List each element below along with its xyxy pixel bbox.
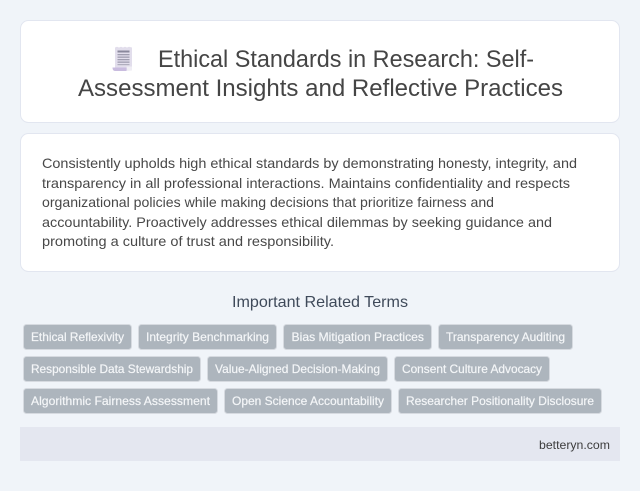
tags xyxy=(24,324,602,414)
tag: Algorithmic Fairness Assessment: Algorithmic Fairness Assessment xyxy=(31,394,211,408)
tag: Integrity Benchmarking: Integrity Benchmarking xyxy=(146,330,269,344)
description text: organizational policies while making decisions that prioritize fairness and xyxy=(42,194,494,210)
icon: document scroll xyxy=(112,47,132,71)
footer bar xyxy=(20,427,620,461)
heading: important related terms: Important Related Terms xyxy=(232,294,408,311)
tag: Researcher Positionality Disclosure: Researcher Positionality Disclosure xyxy=(406,394,594,408)
tag: Transparency Auditing: Transparency Auditing xyxy=(446,330,565,344)
tag: Consent Culture Advocacy xyxy=(394,356,550,382)
tag: Open Science Accountability xyxy=(224,388,392,414)
footer text: betteryn.com xyxy=(539,438,610,452)
description text: Consistently upholds high ethical standards by demonstrating honesty, integrity, and xyxy=(42,155,577,171)
tag: Transparency Auditing xyxy=(438,324,572,350)
panel: title card xyxy=(20,20,620,122)
description text: transparency in all professional interactions. Maintains confidentiality and respects xyxy=(42,175,570,191)
tag: Ethical Reflexivity: Ethical Reflexivity xyxy=(31,330,124,344)
tag: Researcher Positionality Disclosure xyxy=(398,388,602,414)
tag: Consent Culture Advocacy: Consent Culture Advocacy xyxy=(402,362,542,376)
description text xyxy=(42,155,577,249)
tag: Bias Mitigation Practices xyxy=(284,324,432,350)
tag: Open Science Accountability: Open Science Accountability xyxy=(232,394,384,408)
tag: Algorithmic Fairness Assessment xyxy=(24,388,218,414)
tag: Ethical Reflexivity xyxy=(24,324,132,350)
tag: Bias Mitigation Practices: Bias Mitigation Practices xyxy=(292,330,424,344)
tag: Value-Aligned Decision-Making: Value-Aligned Decision-Making xyxy=(215,362,380,376)
tag: Value-Aligned Decision-Making xyxy=(208,356,388,382)
panel: description xyxy=(20,134,620,272)
title text: Assessment Insights and Reflective Practices xyxy=(78,75,563,102)
title text: Ethical Standards in Research: Self- xyxy=(158,46,534,73)
tag: Responsible Data Stewardship xyxy=(24,356,200,382)
tag: Responsible Data Stewardship: Responsible Data Stewardship xyxy=(31,362,193,376)
tag: Integrity Benchmarking xyxy=(138,324,276,350)
description text: promoting a culture of trust and responsibility. xyxy=(42,233,334,249)
title text xyxy=(78,46,563,102)
description text: accountability. Proactively addresses ethical dilemmas by seeking guidance and xyxy=(42,214,552,230)
